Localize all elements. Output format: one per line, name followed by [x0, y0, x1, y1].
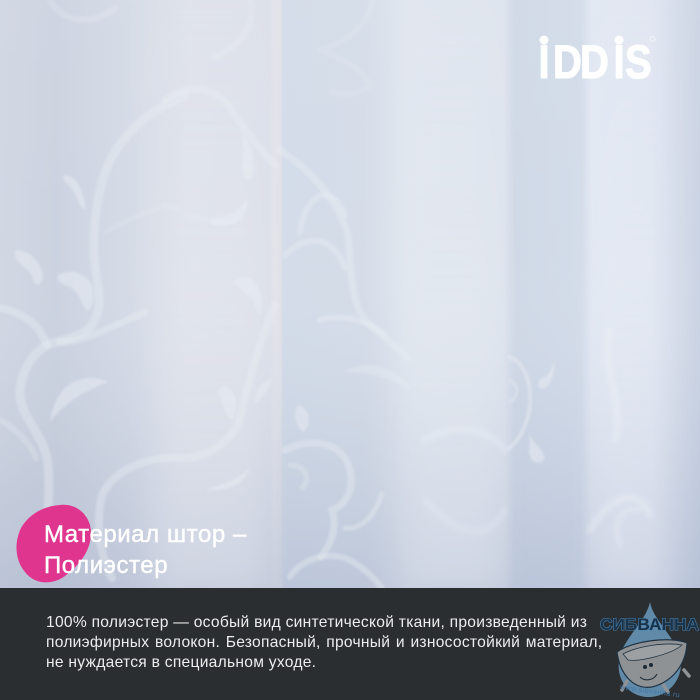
description text — [46, 614, 602, 671]
vine pattern: swirl leaves — [529, 360, 554, 463]
brand name: СИБВАННА — [600, 615, 699, 634]
vine pattern: leaves — [15, 134, 412, 490]
vine pattern: faint far right — [425, 330, 650, 545]
watermark: sibvanna logo — [600, 602, 700, 699]
heading — [44, 521, 247, 579]
description text: полиэфирных волокон. Безопасный, прочный и износостойкий материал, — [46, 634, 602, 651]
heading: Материал штор – — [44, 521, 247, 548]
vine pattern: right panel swirl — [509, 357, 530, 448]
icon: smiling bathtub — [617, 640, 689, 692]
icon: water drop — [619, 602, 681, 697]
description band — [0, 588, 700, 700]
website: www.sibvanna.ru — [619, 684, 680, 699]
description text: 100% полиэстер — особый вид синтетической ткани, произведенный из — [46, 614, 587, 631]
heading: Полиэстер — [44, 552, 168, 579]
vine pattern: centre panel — [280, 0, 408, 588]
description text: не нуждается в специальном уходе. — [46, 654, 316, 671]
vine pattern: left panel — [0, 0, 275, 578]
lighter folds lower down — [150, 0, 670, 590]
